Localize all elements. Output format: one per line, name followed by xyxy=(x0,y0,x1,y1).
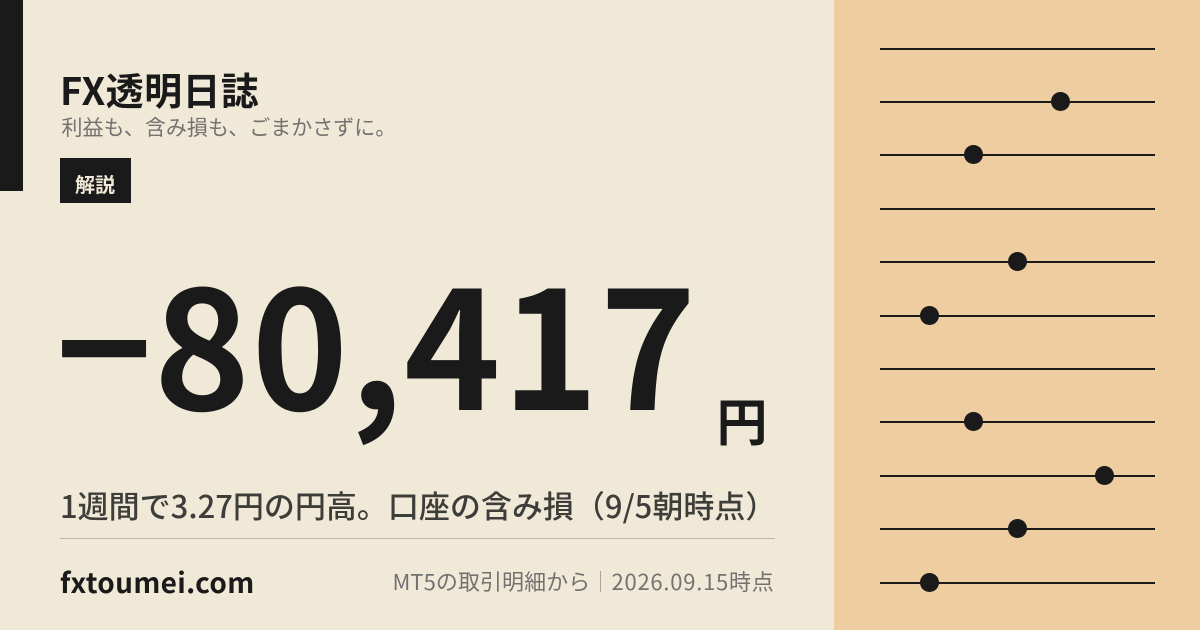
title: FX透明日誌 xyxy=(60,61,259,116)
unit: yen: 円 xyxy=(716,382,768,456)
description: 1週間で3.27円の円高。口座の含み損（9/5朝時点） xyxy=(60,482,776,526)
tagline: 利益も、含み損も、ごまかさずに。 xyxy=(62,112,396,142)
panel: dot lines xyxy=(834,0,1200,630)
source: MT5の取引明細から xyxy=(392,565,590,597)
big number: −80,417 xyxy=(56,221,698,458)
site url: fxtoumei.com xyxy=(60,562,255,602)
date: 2026.09.15時点 xyxy=(612,565,775,597)
dots xyxy=(920,92,1114,592)
divider xyxy=(60,538,775,539)
panel: main xyxy=(0,0,834,630)
tag: 解説: 解説 xyxy=(75,169,115,198)
tag: 解説 xyxy=(60,158,131,203)
accent bar xyxy=(0,0,23,191)
separator xyxy=(600,571,601,592)
